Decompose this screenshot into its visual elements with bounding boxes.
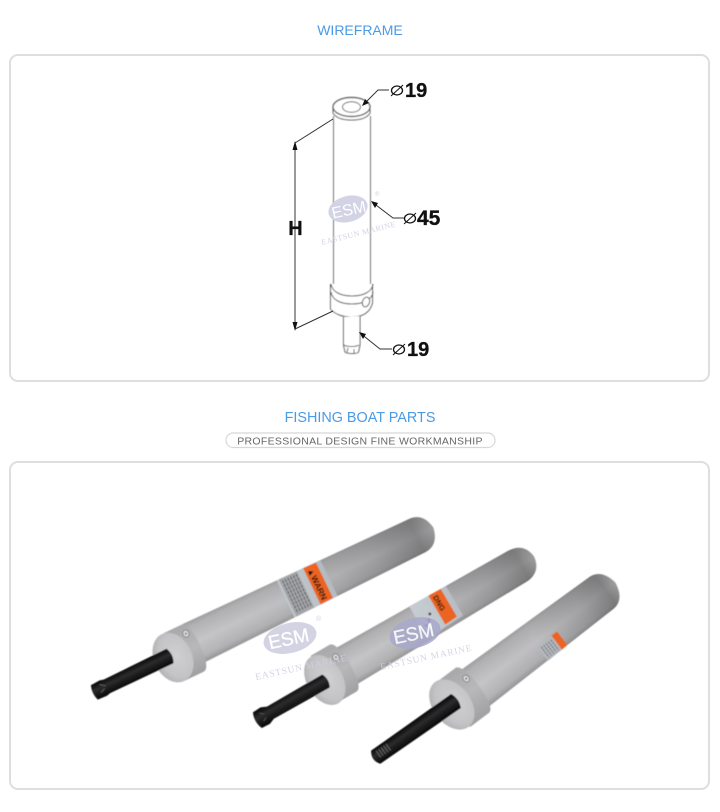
tube body bbox=[334, 116, 370, 287]
dimension: height H bbox=[288, 119, 333, 331]
warning label bbox=[279, 562, 333, 617]
tube bbox=[334, 538, 545, 685]
label backing bbox=[409, 585, 464, 638]
top cap bbox=[333, 98, 370, 120]
heading: wireframe: WIREFRAME bbox=[317, 22, 403, 38]
watermark: ESM logo on wireframe: EASTSUN MARINE bbox=[320, 220, 397, 247]
watermark: ESM logo left bbox=[255, 615, 348, 683]
collar bbox=[420, 662, 496, 739]
watermark: ESM logo on wireframe bbox=[320, 191, 397, 247]
watermark: ESM logo right bbox=[380, 612, 473, 673]
dimension: tube diameter 45 bbox=[371, 201, 441, 230]
black shaft bbox=[251, 672, 332, 729]
pedestal 1 bbox=[89, 508, 446, 701]
pedestal 2 bbox=[251, 533, 548, 729]
dimension: top diameter 19: 19 bbox=[405, 80, 427, 102]
tube shading bbox=[334, 538, 545, 685]
collar bbox=[295, 641, 364, 712]
watermark: ESM logo right: ESM bbox=[392, 620, 436, 649]
dimension: shaft diameter 19 bbox=[359, 332, 429, 361]
warning label: ▲WARN bbox=[305, 566, 329, 602]
dimension: top diameter 19 bbox=[362, 80, 427, 106]
panel: wireframe bbox=[10, 55, 709, 381]
lower shaft bbox=[344, 316, 360, 354]
watermark: ESM logo right: EASTSUN MARINE bbox=[380, 644, 473, 673]
black shaft bbox=[368, 693, 463, 766]
dimension: shaft diameter 19: 19 bbox=[407, 339, 429, 361]
pedestal 3 bbox=[368, 559, 632, 766]
dimension: height H: H bbox=[288, 218, 303, 240]
watermark: ESM logo left: EASTSUN MARINE bbox=[255, 654, 348, 683]
tube and collar bbox=[420, 559, 632, 739]
dimension: tube diameter 45: 45 bbox=[417, 207, 441, 230]
heading: fishing boat parts: FISHING BOAT PARTS bbox=[285, 410, 435, 426]
collar bbox=[145, 621, 211, 689]
tube shading bbox=[182, 508, 443, 664]
black shaft bbox=[89, 647, 175, 701]
watermark: ESM logo left: ESM bbox=[267, 625, 311, 654]
tube bbox=[460, 564, 629, 707]
watermark: ESM logo left: ® bbox=[316, 615, 322, 623]
wireframe drawing of pedestal bbox=[330, 98, 373, 354]
watermark: ESM logo on wireframe: ESM bbox=[330, 199, 368, 223]
tube bbox=[182, 508, 443, 664]
warning label bbox=[412, 589, 457, 634]
tube and collar bbox=[145, 508, 446, 689]
watermark: ESM logo on wireframe: ® bbox=[375, 191, 380, 198]
subtitle pill: PROFESSIONAL DESIGN FINE WORKMANSHIP bbox=[237, 436, 483, 448]
tube shading bbox=[460, 564, 629, 707]
collar bbox=[330, 284, 373, 317]
panel: product photo bbox=[10, 462, 709, 789]
tube and collar bbox=[295, 533, 548, 712]
label backing bbox=[277, 560, 338, 617]
warning label bbox=[537, 631, 568, 661]
warning label: DNG bbox=[431, 594, 447, 613]
